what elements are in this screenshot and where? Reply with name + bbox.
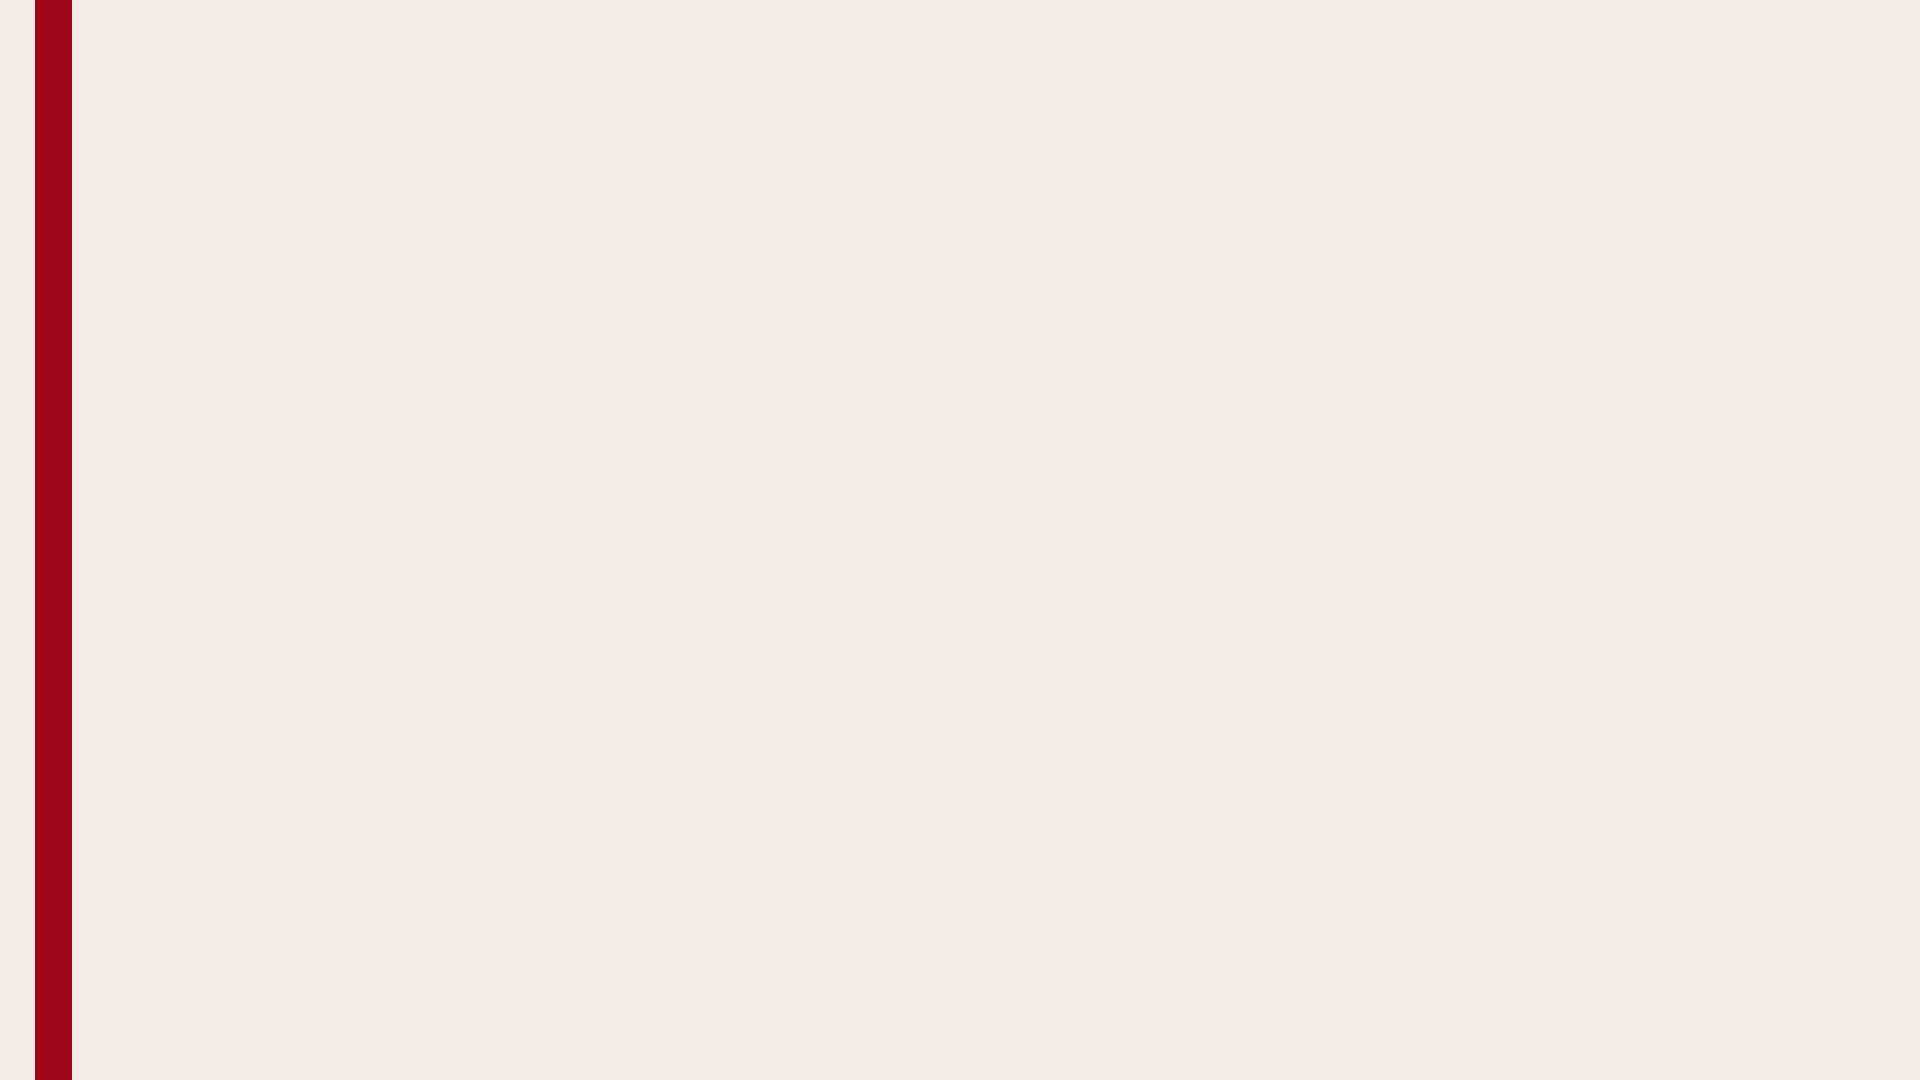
accent bar: crimson vertical stripe	[35, 0, 72, 1080]
